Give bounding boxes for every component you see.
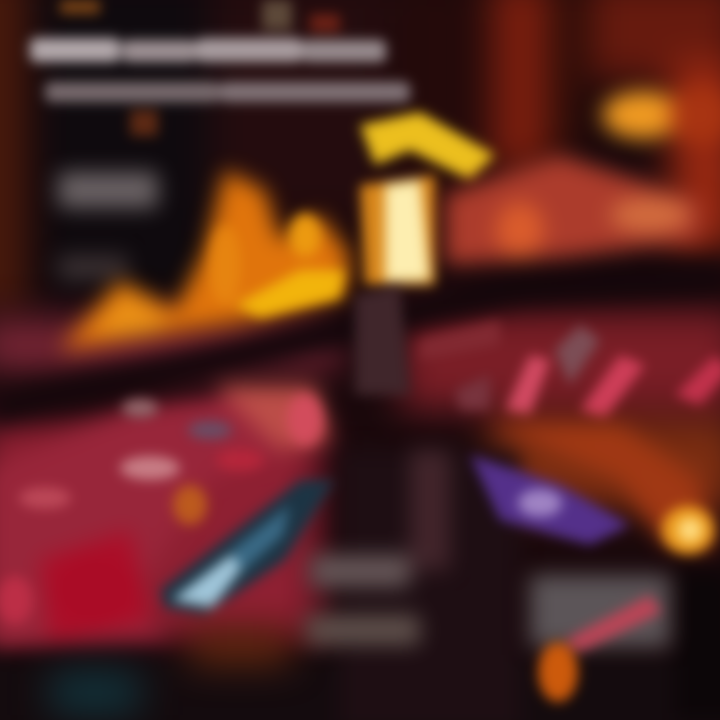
flames: [60, 170, 350, 350]
arch and orange glow: lower right: [490, 425, 715, 550]
patchwork: lower left: [0, 385, 330, 645]
red counter right of flame: [445, 155, 700, 265]
purple panel: [470, 455, 630, 545]
background: upper wall: [0, 0, 720, 310]
background: red middle band: [0, 310, 720, 640]
bottom accents: [50, 630, 290, 715]
patchwork highlights: [0, 394, 323, 624]
glow: lower right: [662, 506, 714, 554]
title block: [30, 0, 410, 136]
background: dark lower floor: [0, 450, 720, 720]
blue streak: [160, 480, 335, 615]
flame core: [209, 112, 495, 318]
grey panel: lower right: [530, 575, 670, 647]
pink stripes: [355, 285, 720, 418]
dark divider bands: [0, 262, 720, 425]
pink streak and orange drop: [538, 595, 662, 702]
glow: top right: [602, 85, 720, 145]
text block: left caption: [58, 172, 158, 280]
grey panel: centre bottom: [305, 450, 450, 645]
